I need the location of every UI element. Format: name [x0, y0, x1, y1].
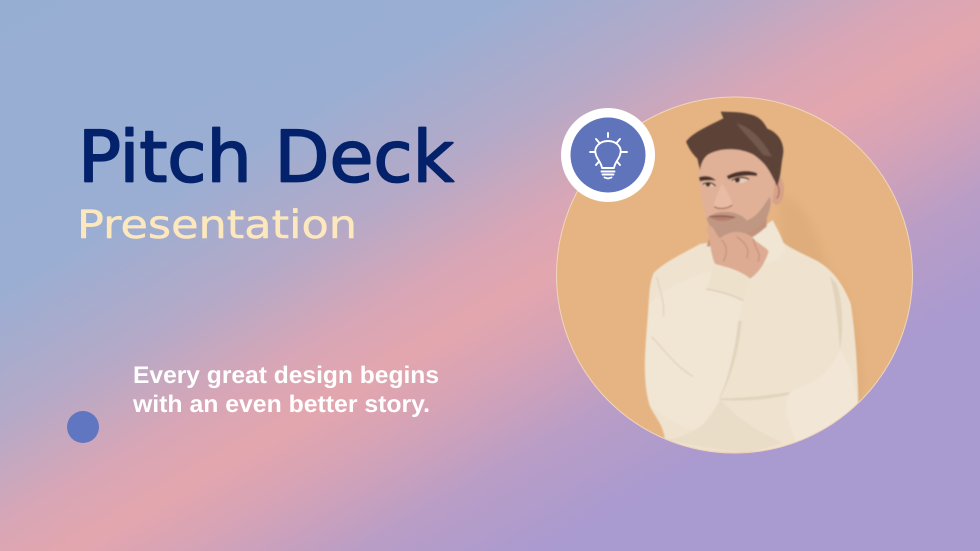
decorative dot	[67, 411, 99, 443]
mouth	[709, 215, 735, 221]
right forearm shading	[789, 391, 797, 395]
sweater	[645, 221, 858, 453]
eyes	[703, 178, 748, 187]
nose	[714, 185, 732, 208]
tagline: Every great design begins	[133, 362, 439, 389]
eyebrows	[699, 171, 757, 181]
photo circle: thinking man	[556, 97, 912, 453]
turtleneck collar	[752, 220, 785, 263]
subtitle: Presentation	[77, 203, 357, 248]
tagline: with an even better story.	[132, 391, 430, 418]
tagline	[132, 362, 439, 418]
lightbulb badge	[561, 108, 655, 202]
neck	[706, 219, 768, 247]
ear	[769, 175, 784, 205]
raised arm	[697, 322, 738, 428]
fist	[707, 226, 769, 279]
title: Pitch Deck	[78, 116, 454, 198]
face	[699, 146, 775, 238]
wall shadow	[780, 197, 861, 410]
beard shadow	[707, 197, 771, 238]
hair	[686, 112, 783, 186]
sweater shading	[717, 277, 842, 401]
icon: lightbulb	[590, 133, 627, 178]
